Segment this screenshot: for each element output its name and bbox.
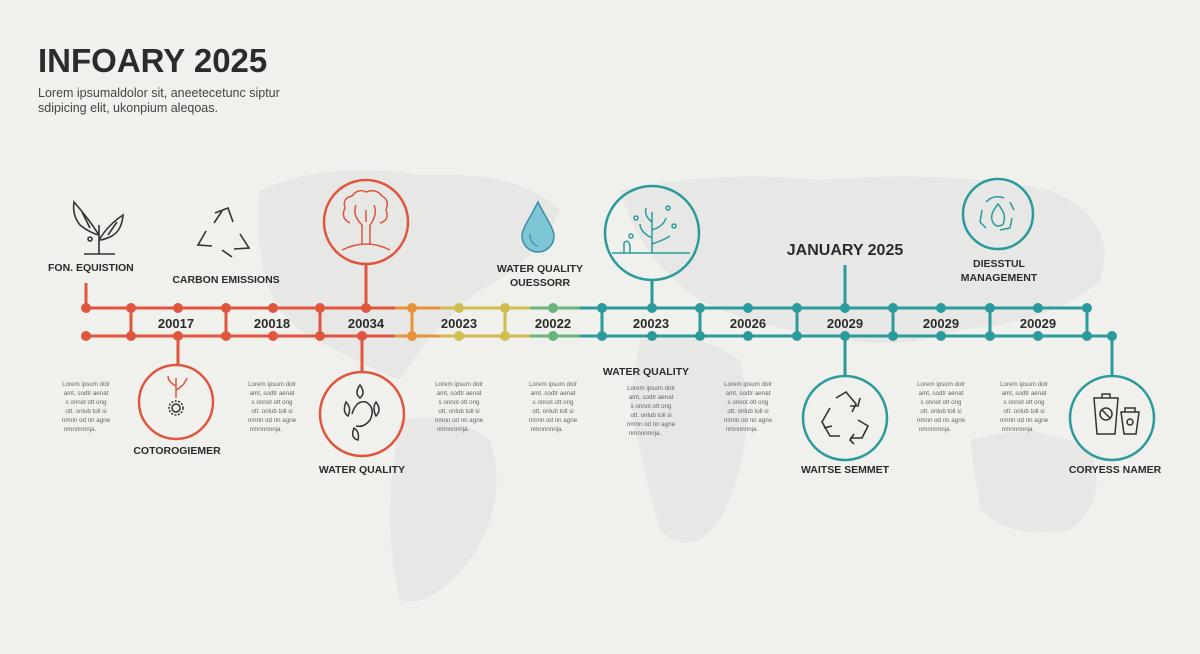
- year labels: 20026: [730, 316, 766, 331]
- timeline: [86, 264, 1112, 376]
- text blocks: lorem: ott. onlub toll si: [920, 408, 962, 415]
- text blocks: lorem: amt, sodtr aenat: [1002, 390, 1047, 397]
- text blocks: lorem: nmnn od nn agne: [529, 417, 578, 424]
- text blocks: lorem: nmnn od nn agne: [248, 417, 297, 424]
- icon: recycle: [198, 208, 249, 257]
- label: diesstul management: MANAGEMENT: [961, 272, 1038, 284]
- text blocks: lorem: nmnnnnnja.: [1002, 426, 1034, 433]
- text blocks: lorem: s onnot ott ong: [1004, 399, 1045, 406]
- title: INFOARY 2025: [38, 42, 267, 79]
- text blocks: lorem: amt, sodtr aenat: [64, 390, 109, 397]
- text blocks: lorem: nmnnnnnja.: [629, 430, 661, 437]
- text blocks: lorem: amt, sodtr aenat: [629, 394, 674, 401]
- label: water quality oversight: WATER QUALITY: [497, 263, 583, 275]
- text blocks: lorem: nmnn od nn agne: [435, 417, 484, 424]
- text blocks: lorem: nmnnnnnja.: [250, 426, 282, 433]
- label: cotorogiemer: COTOROGIEMER: [133, 445, 221, 457]
- text blocks: lorem: ott. onlub toll si: [727, 408, 769, 415]
- world map background: [258, 170, 1104, 602]
- text blocks: lorem: nmnnnnnja.: [531, 426, 563, 433]
- text blocks: lorem: nmnn od nn agne: [627, 421, 676, 428]
- year labels: 20029: [1020, 316, 1056, 331]
- icon: water drop: [522, 202, 554, 252]
- timeline nodes: [81, 303, 1117, 341]
- label: diesstul management: [961, 258, 1038, 284]
- label: water quality oversight: [497, 263, 583, 289]
- label: waitse semmet: WAITSE SEMMET: [801, 464, 890, 476]
- year labels: 20023: [441, 316, 477, 331]
- text blocks: lorem: ott. onlub toll si: [65, 408, 107, 415]
- text blocks: lorem: ott. onlub toll si: [1003, 408, 1045, 415]
- year labels: 20023: [633, 316, 669, 331]
- icon: recycle circle (teal): [803, 376, 887, 460]
- text blocks: lorem: s onnot ott ong: [252, 399, 293, 406]
- text blocks: lorem: amt, sodtr aenat: [726, 390, 771, 397]
- year labels: [158, 316, 1056, 331]
- text blocks: lorem: nmnn od nn agne: [724, 417, 773, 424]
- label: water quality oversight: OUESSORR: [510, 277, 570, 289]
- text blocks: lorem: Lorem ipsum dolr: [627, 385, 675, 392]
- year labels: 20022: [535, 316, 571, 331]
- subtitle: Lorem ipsumaldolor sit, aneetecetunc siptur: [38, 86, 280, 100]
- text blocks: lorem: ott. onlub toll si: [251, 408, 293, 415]
- text blocks: lorem: ott. onlub toll si: [630, 412, 672, 419]
- label: coryess namer: CORYESS NAMER: [1069, 464, 1162, 476]
- icon: sprout gear circle (red): [139, 365, 213, 439]
- text blocks: lorem: nmnnnnnja.: [919, 426, 951, 433]
- icon: leaf plant: [74, 202, 123, 254]
- icon: plant circle (teal): [605, 186, 699, 280]
- text blocks: lorem: ott. onlub toll si: [532, 408, 574, 415]
- label: water quality (bottom red): WATER QUALITY: [319, 464, 405, 476]
- text blocks: lorem: s onnot ott ong: [921, 399, 962, 406]
- text blocks: lorem: s onnot ott ong: [66, 399, 107, 406]
- label: FON. EQUISTION: FON. EQUISTION: [48, 262, 134, 274]
- subtitle: sdipicing elit, ukonpium aleqoas.: [38, 101, 218, 115]
- text blocks: lorem: s onnot ott ong: [439, 399, 480, 406]
- text blocks: lorem: amt, sodtr aenat: [531, 390, 576, 397]
- text blocks: lorem: Lorem ipsum dolr: [248, 381, 296, 388]
- text blocks: lorem: Lorem ipsum dolr: [529, 381, 577, 388]
- year labels: 20017: [158, 316, 194, 331]
- text blocks: lorem: s onnot ott ong: [631, 403, 672, 410]
- text blocks: lorem: nmnnnnnja.: [64, 426, 96, 433]
- text blocks: lorem: amt, sodtr aenat: [250, 390, 295, 397]
- text blocks: lorem: s onnot ott ong: [533, 399, 574, 406]
- label: carbon emissions: CARBON EMISSIONS: [172, 274, 280, 286]
- text blocks: lorem: amt, sodtr aenat: [919, 390, 964, 397]
- icon: tree circle (red): [324, 180, 408, 264]
- text blocks: lorem: nmnn od nn agne: [917, 417, 966, 424]
- year labels: 20018: [254, 316, 290, 331]
- text blocks: lorem: nmnn od nn agne: [1000, 417, 1049, 424]
- text blocks: lorem: Lorem ipsum dolr: [62, 381, 110, 388]
- text blocks: lorem: Lorem ipsum dolr: [435, 381, 483, 388]
- subtitle: [38, 86, 280, 115]
- text blocks: lorem: Lorem ipsum dolr: [1000, 381, 1048, 388]
- icon: bins circle (teal): [1070, 376, 1154, 460]
- icon: leaves circle (red): [320, 372, 404, 456]
- icon: recycle drop circle: [963, 179, 1033, 249]
- label: water quality (teal): WATER QUALITY: [603, 366, 689, 378]
- text blocks: lorem: nmnnnnnja.: [726, 426, 758, 433]
- label: diesstul management: DIESSTUL: [973, 258, 1026, 270]
- text blocks: lorem: nmnnnnnja.: [437, 426, 469, 433]
- year labels: 20029: [827, 316, 863, 331]
- text blocks: lorem: nmnn od nn agne: [62, 417, 111, 424]
- text blocks: lorem: Lorem ipsum dolr: [917, 381, 965, 388]
- text blocks: lorem: Lorem ipsum dolr: [724, 381, 772, 388]
- year labels: 20034: [348, 316, 385, 331]
- text blocks: lorem: ott. onlub toll si: [438, 408, 480, 415]
- text blocks: lorem: s onnot ott ong: [728, 399, 769, 406]
- text blocks: lorem: [62, 381, 1049, 437]
- heading: January 2025: JANUARY 2025: [787, 242, 903, 259]
- year labels: 20029: [923, 316, 959, 331]
- text blocks: lorem: amt, sodtr aenat: [437, 390, 482, 397]
